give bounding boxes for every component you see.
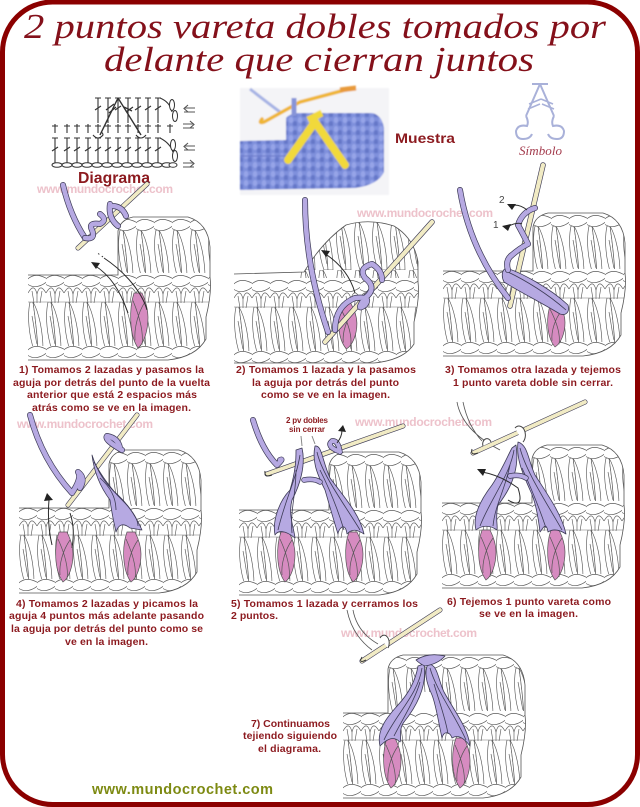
caption 1: 1) Tomamos 2 lazadas y pasamos la bbox=[19, 364, 204, 376]
panel 2 illustration: www.mundocrochet.com bbox=[356, 206, 493, 220]
caption 2: 2) Tomamos 1 lazada y la pasamos bbox=[236, 364, 416, 376]
caption 4: aguja 4 puntos más adelante pasando bbox=[9, 610, 204, 622]
caption 1: anterior que está 2 espacios más bbox=[27, 389, 197, 401]
caption 3: 1 punto vareta doble sin cerrar. bbox=[453, 377, 613, 389]
panel 6 illustration bbox=[442, 402, 632, 591]
caption 7: 7) Continuamos bbox=[251, 718, 330, 730]
panel 1 illustration bbox=[28, 182, 218, 363]
title bbox=[24, 7, 606, 79]
caption 5: 5) Tomamos 1 lazada y cerramos los bbox=[231, 598, 418, 610]
caption 4: 4) Tomamos 2 lazadas y picamos la bbox=[16, 598, 198, 610]
caption 1: atrás como se ve en la imagen. bbox=[32, 402, 191, 414]
panel 3 illustration: 1 bbox=[493, 220, 499, 231]
label: Muestra: Muestra bbox=[395, 130, 455, 146]
caption 7 bbox=[243, 718, 337, 755]
caption 3: 3) Tomamos otra lazada y tejemos bbox=[445, 364, 621, 376]
crochet diagram bbox=[52, 98, 195, 167]
panel 7 illustration: www.mundocrochet.com bbox=[340, 626, 477, 640]
footer website: www.mundocrochet.com bbox=[91, 782, 273, 798]
caption 1: aguja por detrás del punto de la vuelta bbox=[13, 377, 210, 389]
panel 5 illustration: www.mundocrochet.com bbox=[354, 415, 492, 429]
caption 5 bbox=[231, 598, 418, 622]
caption 7: tejiendo siguiendo bbox=[243, 730, 337, 742]
panel 4 illustration bbox=[16, 415, 209, 596]
panel 3 illustration: 2 bbox=[499, 195, 505, 206]
panel 5 illustration bbox=[239, 415, 492, 598]
label: Símbolo: Símbolo bbox=[519, 143, 562, 158]
caption 2: como se ve en la imagen. bbox=[261, 389, 390, 401]
panel 4 illustration: www.mundocrochet.com bbox=[16, 417, 153, 431]
caption 1 bbox=[13, 364, 210, 414]
caption 2 bbox=[236, 364, 416, 401]
caption 6: se ve en la imagen. bbox=[479, 608, 578, 620]
sample photo bbox=[240, 88, 389, 195]
label: Diagrama: Diagrama bbox=[78, 170, 150, 187]
caption 2: la aguja por detrás del punto bbox=[252, 377, 399, 389]
panel 7 illustration bbox=[340, 610, 533, 801]
panel 3 illustration bbox=[443, 165, 633, 359]
caption 5: 2 puntos. bbox=[231, 610, 278, 622]
caption 6 bbox=[447, 596, 611, 620]
caption 7: el diagrama. bbox=[258, 743, 321, 755]
caption 4: la aguja por detrás del punto como se bbox=[11, 623, 203, 635]
caption 4 bbox=[9, 598, 204, 648]
caption 6: 6) Tejemos 1 punto vareta como bbox=[447, 596, 611, 608]
panel 5 illustration: sin cerrar bbox=[289, 425, 325, 434]
title: delante que cierran juntos bbox=[104, 40, 534, 79]
panel 5 illustration: 2 pv dobles bbox=[286, 416, 329, 425]
title: 2 puntos vareta dobles tomados por bbox=[24, 7, 606, 46]
panel 1 illustration: www.mundocrochet.com bbox=[36, 182, 173, 196]
caption 3 bbox=[445, 364, 621, 389]
panel 2 illustration bbox=[234, 200, 493, 368]
caption 4: ve en la imagen. bbox=[65, 636, 148, 648]
stitch symbol bbox=[516, 84, 564, 139]
